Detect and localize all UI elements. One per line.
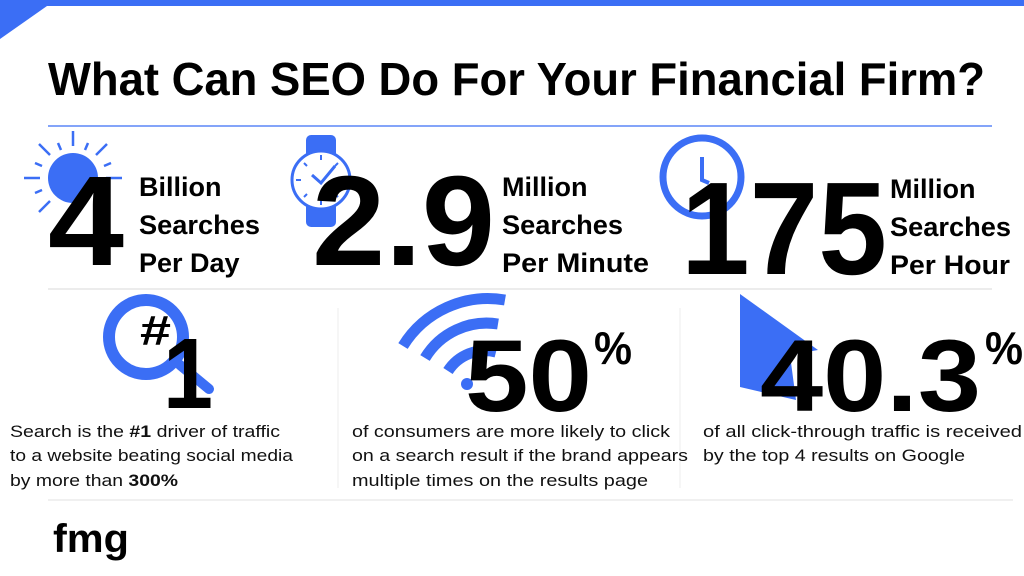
stat: 4 billion per day: Searches xyxy=(139,210,260,240)
top accent bar xyxy=(0,0,1024,39)
stat: 4 billion per day: Per Day xyxy=(139,248,240,278)
stat: 175 million per hour: Million xyxy=(890,174,975,204)
panel: 40.3% xyxy=(703,294,1023,465)
stat: 4 billion per day: Billion xyxy=(139,172,222,202)
stat: 2.9 million per minute: Per Minute xyxy=(502,248,649,278)
panel: 40.3%: by the top 4 results on Google xyxy=(703,446,965,465)
stat: 175 million per hour: Searches xyxy=(890,212,1011,242)
logo: fmg: fmg xyxy=(53,517,129,561)
stat: 2.9 million per minute: 2.9 xyxy=(312,150,495,293)
panel: 40.3%: 40.3 xyxy=(760,319,981,433)
icon: cursor arrow xyxy=(740,294,818,400)
panel: #1 driver: to a website beating social media xyxy=(10,446,294,465)
stat: 4 billion per day: 4 xyxy=(48,150,124,293)
stat: 2.9 million per minute: Million xyxy=(502,172,587,202)
panel: 50%: of consumers are more likely to click xyxy=(352,422,671,441)
panel: #1 driver: Search is the #1 driver of traffic xyxy=(10,422,281,441)
stat: 175 million per hour: Per Hour xyxy=(890,250,1011,280)
icon: watch xyxy=(292,135,350,227)
icon: sun xyxy=(24,131,122,212)
panel: #1 driver: by more than 300% xyxy=(10,471,178,490)
stat: 175 million per hour: 175 xyxy=(681,155,887,302)
icon: clock xyxy=(663,138,741,216)
icon: wifi signal xyxy=(403,299,505,390)
stat: 2.9 million per minute: Searches xyxy=(502,210,623,240)
panel: #1 driver: # xyxy=(140,307,171,354)
panel: 50%: 50 xyxy=(465,319,592,433)
icon: magnifier xyxy=(109,300,209,389)
stat: 4 billion per day xyxy=(24,131,260,293)
panel: 50%: on a search result if the brand appears xyxy=(352,446,688,465)
panel: #1 driver xyxy=(10,300,294,490)
panel: 50%: % xyxy=(594,322,632,374)
panel: 50% xyxy=(352,299,688,490)
panel: 50%: multiple times on the results page xyxy=(352,471,648,490)
panel: #1 driver: 1 xyxy=(163,318,213,430)
stat: 2.9 million per minute xyxy=(292,135,649,293)
title: What Can SEO Do For Your Financial Firm? xyxy=(48,53,985,105)
stat: 175 million per hour xyxy=(663,138,1011,302)
panel: 40.3%: of all click-through traffic is received xyxy=(703,422,1022,441)
